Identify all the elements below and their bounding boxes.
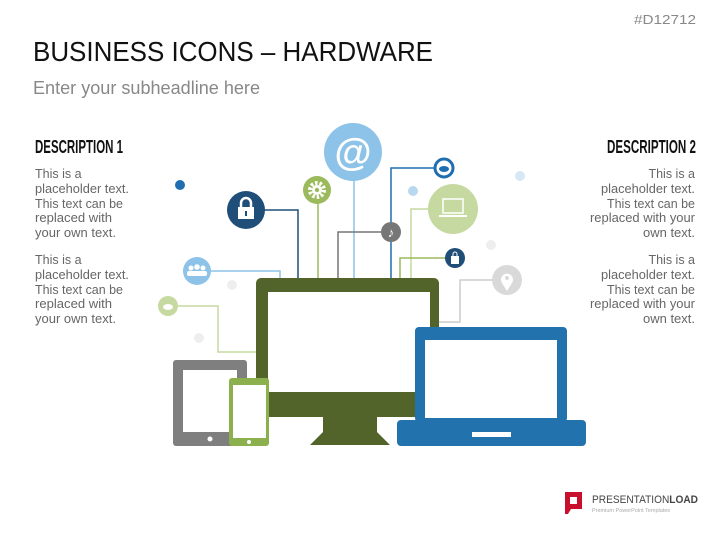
icon: at sign: @ — [334, 132, 372, 174]
text block: description 2 — [590, 137, 696, 326]
icon: laptop — [428, 184, 478, 234]
text block: description 1: placeholder text. — [35, 268, 129, 282]
text block: description 1: your own text. — [35, 226, 116, 240]
icon: gear — [303, 176, 331, 204]
text block: description 2: own text. — [643, 312, 695, 326]
logo: PRESENTATIONLOAD — [592, 494, 698, 506]
smartphone — [229, 378, 269, 446]
logo: Premium PowerPoint Templates — [592, 508, 670, 514]
icon: people — [183, 257, 211, 285]
icon: at sign — [324, 123, 382, 181]
text block: description 2: replaced with your — [590, 297, 695, 311]
connector lines — [178, 168, 494, 352]
icon: shopping bag — [445, 248, 465, 268]
text block: description 1: your own text. — [35, 312, 116, 326]
text block: description 1: This is a — [35, 167, 82, 181]
text block: description 1: DESCRIPTION 1 — [35, 137, 123, 157]
text block: description 1: This is a — [35, 253, 82, 267]
text block: description 2: This is a — [648, 253, 695, 267]
text block: description 1 — [35, 137, 129, 326]
subheadline: Enter your subheadline here — [33, 78, 260, 98]
text block: description 2: own text. — [643, 226, 695, 240]
monitor — [256, 278, 439, 445]
decorative dots — [175, 171, 525, 343]
icon: music — [381, 222, 401, 242]
text block: description 1: This text can be — [35, 197, 123, 211]
laptop — [397, 327, 586, 446]
icon: lock — [227, 191, 265, 229]
icon: music: ♪ — [388, 225, 394, 240]
text block: description 1: placeholder text. — [35, 182, 129, 196]
text block: description 2: placeholder text. — [601, 182, 695, 196]
code label: #D12712 — [634, 12, 696, 27]
text block: description 1: replaced with — [35, 297, 112, 311]
title: BUSINESS ICONS – HARDWARE — [33, 36, 433, 67]
icon: location — [492, 265, 522, 295]
text block: description 2: This is a — [648, 167, 695, 181]
logo — [565, 492, 698, 514]
text block: description 2: This text can be — [607, 197, 695, 211]
text block: description 2: placeholder text. — [601, 268, 695, 282]
icon: cloud top — [435, 159, 453, 177]
tablet — [173, 360, 247, 446]
text block: description 1: This text can be — [35, 283, 123, 297]
text block: description 2: replaced with your — [590, 211, 695, 225]
text block: description 2: This text can be — [607, 283, 695, 297]
icon: cloud left — [158, 296, 178, 316]
text block: description 1: replaced with — [35, 211, 112, 225]
